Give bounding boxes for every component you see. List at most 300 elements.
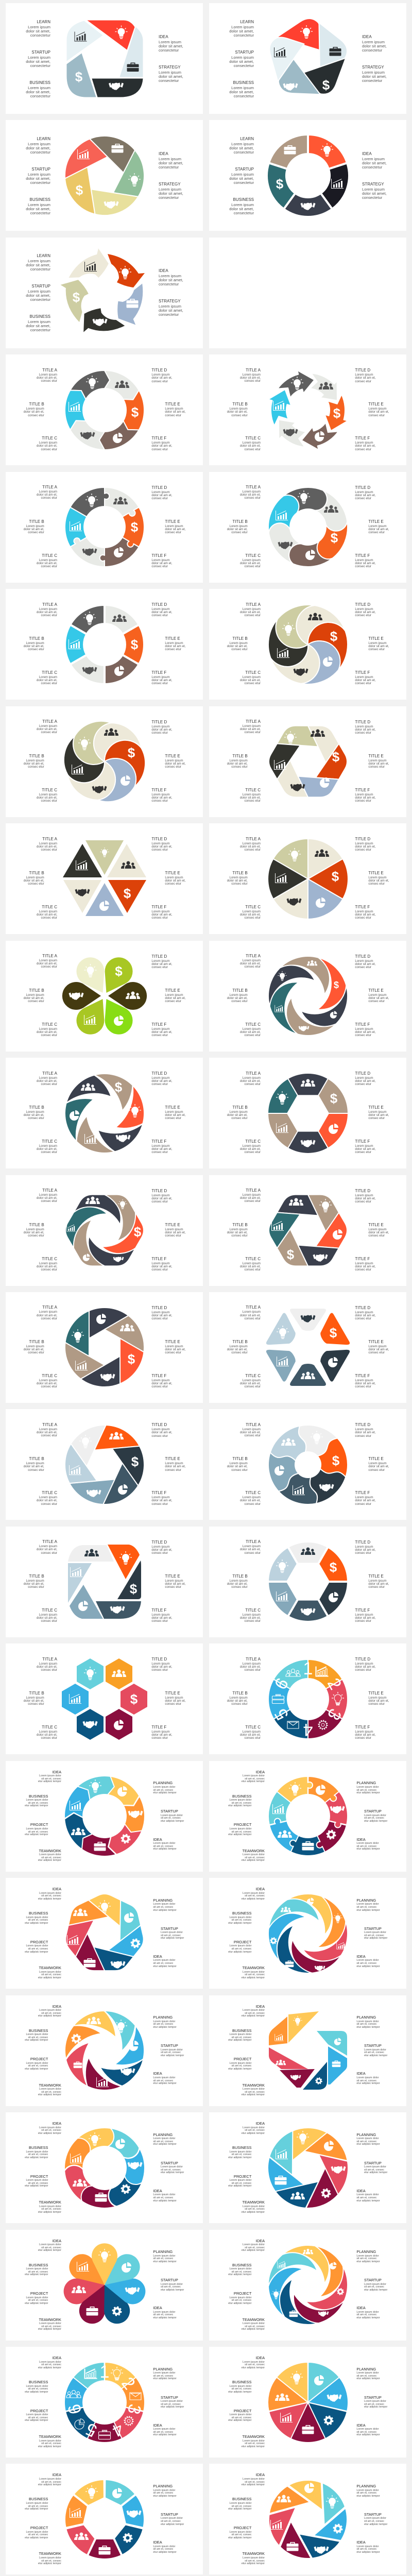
label IDEA: [356, 2424, 380, 2437]
label STARTUP: Lorem ipsum dolor sit amet, consectetur: [26, 172, 50, 185]
label TITLE D: [151, 602, 172, 618]
label TITLE E: TITLE E: [368, 1574, 384, 1579]
numerals: 5: [270, 1705, 293, 1723]
segment briefcase: [119, 27, 143, 77]
label TITLE C: Lorem ipsum dolor sit am et, consec etur: [37, 1613, 57, 1623]
segment people: [68, 1545, 113, 1562]
label TITLE F: Lorem ipsum dolor sit am et, consec etur: [151, 1730, 172, 1740]
segment dollar: $: [331, 869, 339, 884]
label TITLE D: [355, 1657, 375, 1672]
label TITLE C: TITLE C: [42, 905, 57, 909]
label TITLE F: Lorem ipsum dolor sit am et, consec etur: [355, 1261, 375, 1272]
panel: triangles: [6, 823, 203, 934]
segment briefcase: [87, 2421, 122, 2443]
label TITLE C: TITLE C: [245, 1256, 261, 1261]
label BUSINESS: Lorem ipsum dolor sit amet, consectetur: [229, 202, 254, 215]
label TITLE C: Lorem ipsum dolor sit am et, consec etur: [240, 441, 261, 451]
label TITLE D: TITLE D: [355, 1422, 370, 1427]
label TITLE E: Lorem ipsum dolor sit am et, consec etur: [368, 1696, 389, 1706]
panel: hexagon ring: [209, 1058, 406, 1168]
numerals: 1: [303, 1659, 313, 1679]
segment handshake: [263, 519, 308, 567]
label TITLE D: TITLE D: [355, 837, 370, 841]
label BUSINESS: [25, 2029, 48, 2042]
label TITLE E: Lorem ipsum dolor sit am et, consec etur: [368, 524, 389, 534]
panel: square shutter: [6, 1527, 203, 1637]
label TITLE F: [355, 1022, 375, 1037]
segment dollar: [313, 1313, 350, 1355]
label TITLE C: [240, 1490, 261, 1506]
label IDEA: IDEA: [53, 2121, 61, 2126]
segment people: [85, 714, 146, 774]
label IDEA: Lorem ipsum dolor sit am et, consec etur adipisic tempor: [38, 2243, 61, 2252]
segment bulb: [270, 834, 325, 889]
label TITLE B: [24, 1340, 44, 1354]
segment chart: [299, 1655, 345, 1693]
segment people: [61, 2376, 89, 2415]
label TITLE A: Lorem ipsum dolor sit am et, consec etur: [37, 490, 57, 500]
label TITLE D: Lorem ipsum dolor sit am et, consec etur: [355, 842, 375, 852]
panel: straight shutter: [6, 1292, 203, 1403]
segment pie: [296, 759, 342, 804]
label TITLE F: TITLE F: [151, 1725, 166, 1730]
segment chart: [268, 859, 308, 899]
label PROJECT: Lorem ipsum dolor sit am et, consec etur adipisic tempor: [25, 2062, 48, 2071]
label TITLE C: TITLE C: [245, 670, 261, 675]
segment bulb: [275, 1773, 315, 1806]
label TITLE C: TITLE C: [42, 1608, 57, 1613]
segment people: [287, 598, 348, 657]
segment people: [60, 1810, 96, 1852]
label TITLE E: Lorem ipsum dolor sit am et, consec etur: [165, 407, 185, 417]
panel: puzzle ring: [6, 472, 203, 583]
label TITLE D: TITLE D: [151, 1306, 167, 1310]
label TITLE A: [37, 1657, 57, 1672]
label IDEA: IDEA: [153, 2423, 162, 2428]
label STARTUP: Lorem ipsum dolor sit am et, consec etur adipisic tempor: [161, 1931, 184, 1940]
label TITLE C: [37, 1725, 57, 1740]
label TITLE E: TITLE E: [368, 988, 384, 993]
label TITLE B: Lorem ipsum dolor sit am et, consec etur: [24, 1345, 44, 1354]
label TITLE C: Lorem ipsum dolor sit am et, consec etur: [240, 1730, 261, 1740]
label PLANNING: PLANNING: [153, 2367, 173, 2371]
label TITLE F: Lorem ipsum dolor sit am et, consec etur: [355, 910, 375, 920]
label PROJECT: [25, 2409, 48, 2422]
label TITLE A: TITLE A: [42, 1071, 57, 1076]
segment pie: [100, 1896, 145, 1941]
segment gear: [294, 2167, 339, 2212]
label TITLE D: Lorem ipsum dolor sit am et, consec etur: [151, 607, 172, 617]
label TEAMWORK: TEAMWORK: [242, 2434, 265, 2439]
label TITLE D: TITLE D: [355, 1540, 370, 1545]
segment dollar: [261, 158, 299, 211]
label PROJECT: [228, 2057, 251, 2071]
segment bulb: [296, 1188, 342, 1232]
panel: empty: [209, 238, 406, 348]
label PLANNING: [356, 2367, 380, 2381]
label PLANNING: Lorem ipsum dolor sit am et, consec etur adipisic tempor: [153, 1786, 177, 1794]
segment handshake: [287, 2272, 347, 2332]
segment dollar: $: [75, 69, 82, 84]
label IDEA: [242, 2473, 265, 2487]
segment pie: [287, 2478, 324, 2514]
label IDEA: Lorem ipsum dolor sit amet, consectetur: [159, 274, 183, 286]
label PLANNING: PLANNING: [356, 2484, 376, 2488]
label STARTUP: [161, 2044, 184, 2057]
label TITLE E: TITLE E: [368, 1456, 384, 1461]
label IDEA: IDEA: [159, 268, 168, 273]
panel: seven puzzle ring: [209, 1761, 406, 1872]
diagram: [65, 371, 144, 449]
label TITLE E: TITLE E: [368, 754, 384, 758]
label TITLE C: TITLE C: [42, 553, 57, 558]
segment chart: [62, 1684, 89, 1715]
label IDEA: [242, 1770, 265, 1784]
panel: seven chevron ring: [6, 1761, 203, 1872]
numerals: 2: [323, 1675, 345, 1693]
label TITLE E: Lorem ipsum dolor sit am et, consec etur: [165, 759, 185, 769]
label TITLE A: TITLE A: [246, 368, 261, 372]
label TITLE C: Lorem ipsum dolor sit am et, consec etur: [240, 793, 261, 803]
segment handshake: [76, 1709, 103, 1740]
panel: separate arrows: [209, 354, 406, 465]
segment handshake: [123, 2147, 146, 2185]
label TITLE E: TITLE E: [165, 1340, 180, 1344]
segment handshake: [300, 1460, 349, 1507]
label IDEA: Lorem ipsum dolor sit am et, consec etur adipisic tempor: [153, 2076, 177, 2085]
label BUSINESS: Lorem ipsum dolor sit am et, consec etur adipisic tempor: [228, 2033, 251, 2042]
label TITLE C: Lorem ipsum dolor sit am et, consec etur: [37, 793, 57, 803]
panel: curved shutter: [6, 1058, 203, 1168]
label PROJECT: Lorem ipsum dolor sit am et, consec etur adipisic tempor: [228, 2296, 251, 2305]
segment handshake: [63, 749, 124, 809]
label TITLE B: TITLE B: [232, 1105, 248, 1110]
label TITLE A: Lorem ipsum dolor sit am et, consec etur: [37, 607, 57, 617]
label BUSINESS: [25, 2497, 48, 2511]
panel: wedge shutter: [6, 120, 203, 231]
label TITLE D: Lorem ipsum dolor sit am et, consec etur: [151, 1545, 172, 1555]
segment pie: [69, 1585, 103, 1619]
segment dollar: $: [330, 629, 337, 644]
label TITLE A: [37, 602, 57, 617]
label PROJECT: [228, 1940, 251, 1954]
segment chart: [265, 2505, 306, 2548]
label IDEA: Lorem ipsum dolor sit am et, consec etur adipisic tempor: [153, 2545, 177, 2554]
label TITLE A: Lorem ipsum dolor sit am et, consec etur: [240, 1545, 261, 1555]
label TEAMWORK: TEAMWORK: [242, 1849, 265, 1853]
label TITLE D: TITLE D: [355, 1657, 370, 1662]
panel: seven numbered ring: [6, 2347, 203, 2458]
label TITLE E: Lorem ipsum dolor sit am et, consec etur: [165, 1110, 185, 1120]
label TITLE D: [151, 954, 172, 969]
label TITLE E: [368, 1574, 389, 1589]
label TITLE B: TITLE B: [232, 1456, 248, 1461]
segment people: [265, 2483, 312, 2530]
label TITLE C: [240, 670, 261, 686]
segment handshake: [304, 2376, 351, 2419]
segment bulb: [290, 2127, 327, 2162]
segment handshake: [93, 1933, 136, 1976]
label STARTUP: Lorem ipsum dolor sit am et, consec etur adipisic tempor: [161, 2283, 184, 2292]
segment briefcase: [87, 2538, 122, 2560]
label IDEA: IDEA: [256, 2355, 265, 2360]
label LEARN: Lorem ipsum dolor sit amet, consectetur: [26, 142, 50, 155]
label TITLE A: Lorem ipsum dolor sit am et, consec etur: [240, 1662, 261, 1672]
label TITLE F: TITLE F: [151, 1608, 166, 1613]
label TITLE D: Lorem ipsum dolor sit am et, consec etur: [151, 1193, 172, 1204]
label PLANNING: [356, 1781, 380, 1795]
label PROJECT: [25, 1823, 48, 1837]
label IDEA: [356, 2540, 380, 2554]
segment chart: [60, 735, 108, 786]
numerals: [64, 2362, 145, 2441]
label TITLE C: TITLE C: [245, 1022, 261, 1027]
segment dollar: $: [129, 1581, 137, 1597]
label TITLE C: Lorem ipsum dolor sit am et, consec etur: [37, 1730, 57, 1740]
label BUSINESS: Lorem ipsum dolor sit am et, consec etur adipisic tempor: [228, 2267, 251, 2276]
segment people: [273, 1188, 319, 1232]
label IDEA: Lorem ipsum dolor sit am et, consec etur adipisic tempor: [242, 2009, 265, 2018]
segment bulb: [71, 952, 114, 1000]
segment bulb: [294, 1893, 354, 1954]
segment pie: [313, 1573, 353, 1619]
segment dollar: $: [133, 1224, 141, 1240]
label PLANNING: PLANNING: [153, 2484, 173, 2488]
label TITLE D: TITLE D: [151, 954, 167, 959]
label STARTUP: [161, 1809, 184, 1823]
label TITLE D: Lorem ipsum dolor sit am et, consec etur: [151, 725, 172, 735]
segment bulb: [261, 2261, 318, 2319]
label BUSINESS: [228, 2146, 251, 2159]
segment chart: [85, 2057, 122, 2090]
label TITLE A: TITLE A: [246, 1305, 261, 1310]
label TITLE C: Lorem ipsum dolor sit am et, consec etur: [240, 1379, 261, 1388]
segment chart: [301, 1916, 349, 1964]
label TITLE A: [240, 1657, 261, 1672]
label TITLE E: [368, 1456, 389, 1472]
label TITLE F: [151, 905, 172, 920]
label TITLE C: Lorem ipsum dolor sit am et, consec etur: [240, 1261, 261, 1272]
label STRATEGY: Lorem ipsum dolor sit amet, consectetur: [159, 304, 183, 317]
label TITLE E: [165, 754, 185, 769]
segment dollar: [108, 880, 146, 913]
label TITLE D: [355, 1071, 375, 1086]
segment dollar: $: [72, 290, 80, 305]
label BUSINESS: BUSINESS: [29, 2380, 48, 2384]
label STARTUP: STARTUP: [161, 1926, 178, 1931]
diagram: [256, 2468, 359, 2571]
label TITLE B: TITLE B: [29, 1691, 44, 1696]
label IDEA: [356, 2189, 380, 2202]
label IDEA: Lorem ipsum dolor sit am et, consec etur adipisic tempor: [356, 2193, 380, 2202]
label TITLE A: Lorem ipsum dolor sit am et, consec etur: [240, 373, 261, 383]
diagram: [270, 19, 347, 94]
label TITLE F: TITLE F: [151, 1022, 166, 1027]
label STARTUP: STARTUP: [364, 2395, 382, 2400]
label STARTUP: STARTUP: [161, 2043, 178, 2048]
label TITLE F: Lorem ipsum dolor sit am et, consec etur: [355, 793, 375, 803]
label STARTUP: Lorem ipsum dolor sit am et, consec etur adipisic tempor: [161, 2048, 184, 2057]
label TITLE D: Lorem ipsum dolor sit am et, consec etur: [355, 1311, 375, 1320]
label IDEA: IDEA: [153, 1954, 162, 1959]
segment gear: [312, 1815, 349, 1855]
diagram: [53, 2116, 156, 2219]
label TITLE A: [240, 1071, 261, 1086]
label STARTUP: STARTUP: [364, 2043, 382, 2048]
label TITLE E: [368, 754, 389, 769]
panel: hexagon shutter: [209, 1175, 406, 1286]
label PROJECT: PROJECT: [30, 2057, 48, 2061]
label TITLE B: [227, 1574, 248, 1589]
label BUSINESS: [228, 2263, 251, 2277]
label TITLE F: TITLE F: [355, 553, 370, 558]
label BUSINESS: BUSINESS: [29, 1794, 48, 1799]
label PLANNING: [356, 2133, 380, 2146]
panel: open heptagon shutter: [209, 1995, 406, 2106]
segment chart: [266, 2128, 314, 2176]
label TITLE D: Lorem ipsum dolor sit am et, consec etur: [151, 1662, 172, 1672]
label TITLE C: [37, 436, 57, 451]
segment people: [103, 1314, 148, 1363]
label STARTUP: Lorem ipsum dolor sit am et, consec etur adipisic tempor: [161, 1814, 184, 1823]
label TEAMWORK: Lorem ipsum dolor sit am et, consec etur adipisic tempor: [242, 1971, 265, 1979]
label TEAMWORK: [242, 1966, 265, 1979]
label PLANNING: [153, 2015, 177, 2029]
label IDEA: Lorem ipsum dolor sit am et, consec etur adipisic tempor: [38, 1774, 61, 1783]
label PROJECT: PROJECT: [30, 2526, 48, 2530]
segment dollar: $: [332, 749, 339, 765]
label STRATEGY: STRATEGY: [159, 299, 181, 303]
segment gear: [108, 2518, 146, 2558]
label TITLE F: Lorem ipsum dolor sit am et, consec etur: [151, 558, 172, 568]
label TITLE C: TITLE C: [42, 1490, 57, 1495]
segment dollar: [315, 744, 347, 779]
segment chart: [263, 1105, 302, 1150]
segment briefcase: [61, 2040, 110, 2089]
diagram: [53, 1530, 156, 1633]
segment people: [271, 1655, 316, 1693]
segment briefcase: [83, 131, 136, 174]
label TITLE A: [37, 1188, 57, 1203]
label PROJECT: Lorem ipsum dolor sit am et, consec etur adipisic tempor: [25, 1944, 48, 1954]
label TITLE D: [151, 1422, 172, 1438]
diagram: [53, 2350, 156, 2453]
segment people: [72, 2007, 118, 2052]
label TEAMWORK: [242, 2435, 265, 2448]
label BUSINESS: Lorem ipsum dolor sit amet, consectetur: [26, 86, 50, 98]
label PROJECT: PROJECT: [234, 2057, 251, 2061]
label TITLE F: Lorem ipsum dolor sit am et, consec etur: [151, 441, 172, 451]
label TITLE E: TITLE E: [165, 1574, 180, 1579]
label TEAMWORK: [242, 2318, 265, 2331]
panel: seven straight shutter: [209, 2112, 406, 2223]
diagram: [268, 135, 348, 216]
label TITLE E: TITLE E: [165, 871, 180, 875]
segment dollar: [111, 1445, 145, 1486]
label TITLE A: TITLE A: [42, 602, 57, 607]
label BUSINESS: Lorem ipsum dolor sit am et, consec etur adipisic tempor: [25, 1916, 48, 1925]
segment pie: [101, 1773, 142, 1810]
label IDEA: [242, 2239, 265, 2252]
label TITLE E: Lorem ipsum dolor sit am et, consec etur: [368, 1579, 389, 1589]
label TITLE E: [368, 1340, 389, 1354]
label IDEA: IDEA: [356, 2423, 366, 2428]
label TITLE B: [227, 636, 248, 652]
label PROJECT: PROJECT: [30, 2409, 48, 2413]
label TITLE B: [227, 519, 248, 534]
label TEAMWORK: TEAMWORK: [39, 2434, 61, 2439]
label TITLE E: [368, 988, 389, 1003]
label TITLE F: [355, 1608, 375, 1623]
label TITLE D: [151, 837, 172, 852]
segment pie: [316, 2031, 347, 2056]
label IDEA: Lorem ipsum dolor sit am et, consec etur adipisic tempor: [38, 2361, 61, 2369]
panel: hexagon gap ring: [209, 1527, 406, 1637]
label TITLE F: TITLE F: [355, 1022, 370, 1027]
label TITLE A: Lorem ipsum dolor sit am et, consec etur: [240, 1193, 261, 1203]
label TITLE B: TITLE B: [29, 519, 44, 524]
label TITLE F: [355, 436, 375, 451]
segment dollar: $: [75, 182, 83, 198]
segment pie: [298, 417, 341, 455]
label IDEA: [356, 1838, 380, 1851]
label TITLE D: Lorem ipsum dolor sit am et, consec etur: [355, 1545, 375, 1555]
segment people: [70, 1184, 126, 1242]
label TITLE E: TITLE E: [165, 1105, 180, 1110]
label PROJECT: [228, 2175, 251, 2188]
label TITLE C: TITLE C: [42, 1725, 57, 1730]
segment briefcase: [278, 2520, 321, 2563]
label TITLE B: [227, 1691, 248, 1706]
label TITLE A: Lorem ipsum dolor sit am et, consec etur: [240, 1310, 261, 1320]
label TITLE C: TITLE C: [42, 436, 57, 440]
label TEAMWORK: TEAMWORK: [39, 1965, 61, 1970]
segment people: [96, 600, 141, 639]
segment pie: [298, 976, 351, 1031]
label IDEA: IDEA: [256, 2004, 265, 2009]
label LEARN: Lorem ipsum dolor sit amet, consectetur: [26, 25, 50, 37]
label TITLE B: Lorem ipsum dolor sit am et, consec etur: [24, 1110, 44, 1120]
label TITLE A: [37, 368, 57, 383]
label STARTUP: STARTUP: [161, 1809, 178, 1814]
label TITLE E: [165, 1222, 185, 1238]
segment people: [287, 1073, 328, 1095]
segment handshake: [119, 2493, 147, 2532]
label TITLE C: TITLE C: [42, 1374, 57, 1378]
label TITLE D: Lorem ipsum dolor sit am et, consec etur: [151, 490, 172, 500]
segment pie: [315, 1212, 347, 1248]
label STARTUP: Lorem ipsum dolor sit amet, consectetur: [26, 55, 50, 68]
label TITLE D: TITLE D: [151, 1071, 167, 1076]
segment chart: [60, 1332, 106, 1381]
segment pie: [97, 2476, 138, 2510]
label TITLE E: [368, 1222, 389, 1238]
diagram: [53, 944, 156, 1047]
label TITLE E: [368, 1105, 389, 1120]
label TITLE C: Lorem ipsum dolor sit am et, consec etur: [37, 441, 57, 451]
label TEAMWORK: [38, 1849, 61, 1862]
label PLANNING: Lorem ipsum dolor sit am et, consec etur adipisic tempor: [356, 1786, 380, 1794]
diagram: [53, 1648, 156, 1751]
label BUSINESS: [25, 2380, 48, 2394]
segment people: [62, 1071, 114, 1122]
label TITLE A: Lorem ipsum dolor sit am et, consec etur: [37, 959, 57, 969]
label TITLE E: TITLE E: [368, 871, 384, 875]
label TEAMWORK: Lorem ipsum dolor sit am et, consec etur adipisic tempor: [38, 2088, 61, 2096]
diagram: [53, 1296, 156, 1399]
label TITLE D: TITLE D: [355, 1188, 370, 1193]
label TITLE E: Lorem ipsum dolor sit am et, consec etur: [368, 1227, 389, 1238]
